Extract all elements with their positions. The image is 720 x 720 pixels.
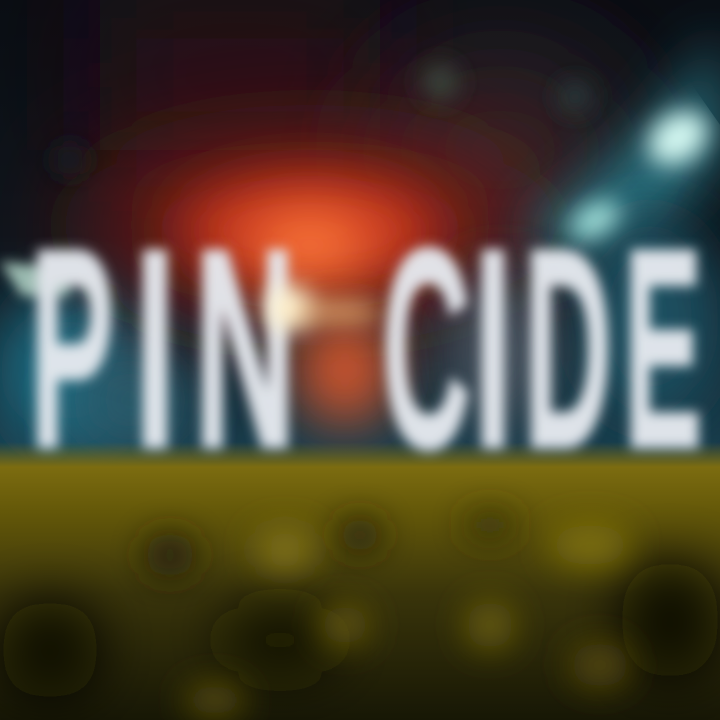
title: PIN CIDE: I [134, 191, 176, 506]
title: PIN CIDE [0, 191, 702, 506]
bright spots in the sky [54, 64, 718, 246]
teal light band [450, 30, 720, 430]
title: PIN CIDE: N [194, 191, 296, 506]
sun flare [264, 284, 383, 332]
red sunset glow [80, 140, 540, 425]
flower field [0, 442, 720, 720]
title: PIN CIDE: P [30, 191, 114, 506]
title: PIN CIDE: I [474, 191, 512, 506]
title: PIN CIDE: C [382, 191, 470, 506]
sky background [0, 0, 720, 470]
